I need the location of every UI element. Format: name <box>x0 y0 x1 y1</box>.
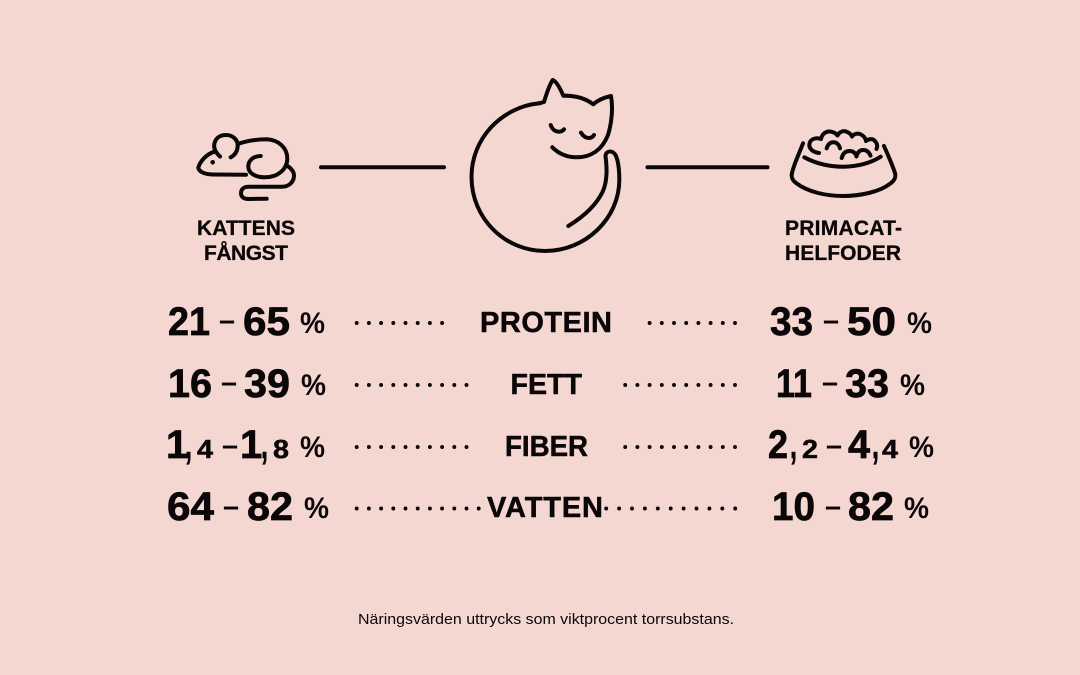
value: Primacat water: % <box>904 492 929 525</box>
value: cat prey water <box>167 485 329 529</box>
value: Primacat fibre: 4 <box>848 423 871 467</box>
heading: Primacat-helfoder <box>785 217 902 265</box>
value: cat prey water: 82 <box>247 485 293 529</box>
connector line: right <box>648 165 768 169</box>
icon: food bowl <box>792 131 895 196</box>
value: cat prey fibre: 1 <box>240 423 262 467</box>
heading: Primacat-helfoder: PRIMACAT- <box>785 217 902 240</box>
row: fett <box>168 362 925 406</box>
dotted leader <box>625 445 735 449</box>
value: Primacat fat: 33 <box>845 362 889 406</box>
value: Primacat water: – <box>825 490 841 523</box>
value: cat prey water: 64 <box>167 485 215 529</box>
value: cat prey fibre <box>166 423 325 467</box>
value: cat prey fibre: 4 <box>197 434 214 464</box>
value: cat prey fibre: – <box>222 429 238 462</box>
value: cat prey protein: % <box>300 307 325 340</box>
value: Primacat fat: 11 <box>776 362 812 406</box>
value: cat prey water: % <box>304 492 329 525</box>
value: cat prey protein: 21 <box>168 300 210 344</box>
dotted leader <box>606 507 735 510</box>
value: cat prey fat: % <box>301 369 326 402</box>
value: Primacat fibre: % <box>909 431 934 464</box>
dotted leader <box>357 321 442 325</box>
dotted leader <box>650 321 735 325</box>
dotted leader <box>625 383 735 387</box>
heading: Kattens fångst: KATTENS <box>197 217 295 240</box>
value: Primacat fibre: 4 <box>882 434 899 464</box>
value: cat prey protein: 65 <box>243 300 290 344</box>
row: protein <box>168 300 932 344</box>
value: cat prey fat: 39 <box>244 362 290 406</box>
value: Primacat water <box>772 485 929 529</box>
connector line: left <box>321 165 444 169</box>
value: cat prey fat: 16 <box>168 362 212 406</box>
value: cat prey protein <box>168 300 325 344</box>
heading: Kattens fångst <box>197 217 295 265</box>
value: Primacat fibre <box>768 423 934 467</box>
value: cat prey fibre: 1 <box>166 423 188 467</box>
value: Primacat water: 10 <box>772 485 815 529</box>
value: cat prey fibre: , <box>261 423 268 467</box>
row: fiber <box>166 423 934 467</box>
heading: Kattens fångst: FÅNGST <box>204 241 288 265</box>
value: cat prey protein: – <box>219 304 235 337</box>
value: Primacat protein: 33 <box>770 300 813 344</box>
footnote: Näringsvärden uttrycks som viktprocent torrsubstans. <box>358 612 734 628</box>
value: Primacat protein: – <box>823 304 839 337</box>
heading: Primacat-helfoder: HELFODER <box>785 242 901 265</box>
dotted leader <box>357 383 467 387</box>
value: Primacat protein: % <box>907 307 932 340</box>
label: protein: PROTEIN <box>480 307 612 339</box>
value: cat prey fibre: 8 <box>273 434 289 464</box>
value: cat prey fibre: , <box>185 423 192 467</box>
value: Primacat fibre: , <box>872 423 879 467</box>
dotted leader <box>357 445 467 449</box>
value: cat prey fat: – <box>221 366 237 399</box>
icon: mouse <box>198 135 294 199</box>
value: Primacat fat: – <box>822 366 838 399</box>
value: Primacat fibre: , <box>790 423 797 467</box>
value: Primacat fibre: 2 <box>802 434 818 464</box>
dotted leader <box>357 507 479 510</box>
value: Primacat protein <box>770 300 932 344</box>
value: Primacat fat <box>776 362 925 406</box>
label: fiber: FIBER <box>505 431 588 463</box>
value: Primacat fat: % <box>900 369 925 402</box>
value: Primacat fibre: 2 <box>768 423 788 467</box>
value: Primacat water: 82 <box>848 485 894 529</box>
value: Primacat fibre: – <box>826 429 842 462</box>
value: cat prey fibre: % <box>300 431 325 464</box>
label: vatten: VATTEN <box>487 492 603 524</box>
icon: sleeping cat <box>472 80 619 251</box>
value: cat prey fat <box>168 362 326 406</box>
value: Primacat protein: 50 <box>847 300 896 344</box>
value: cat prey water: – <box>223 490 239 523</box>
label: fett: FETT <box>510 369 582 401</box>
row: vatten <box>167 485 929 529</box>
